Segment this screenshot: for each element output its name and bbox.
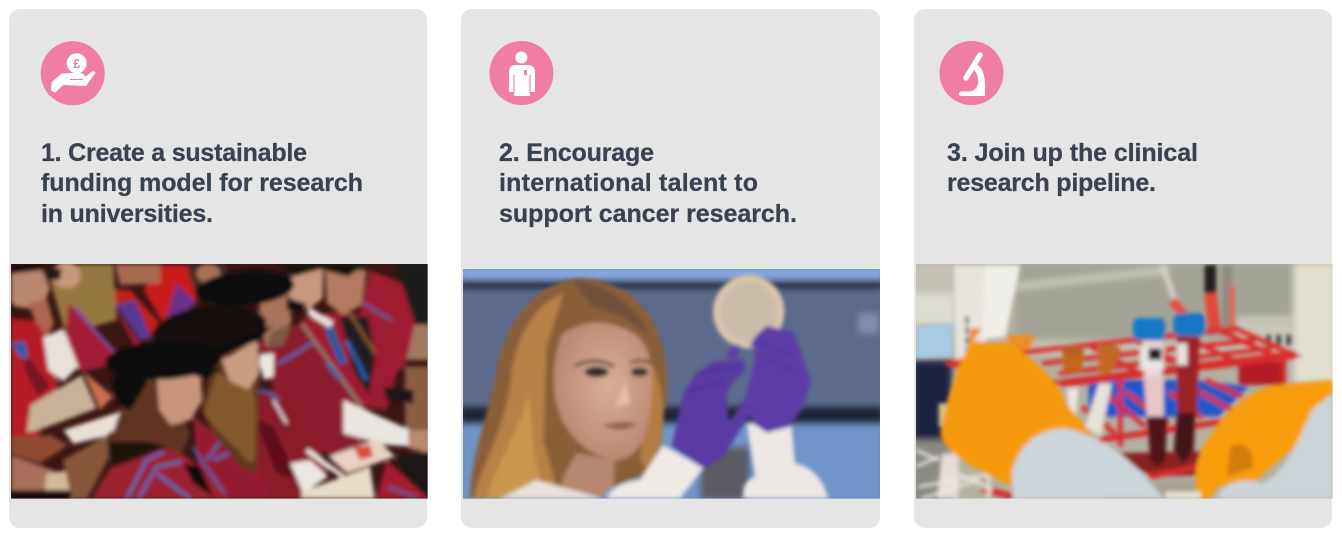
gloves xyxy=(725,343,742,360)
icon: person xyxy=(490,41,554,105)
photo: scientist inspecting a petri dish xyxy=(463,269,880,499)
front graduate with cap xyxy=(92,338,230,499)
heading: international talent: 2. Encourage xyxy=(499,139,654,167)
heading: funding model: 1. Create a sustainable xyxy=(41,139,307,167)
heading: international talent xyxy=(499,139,797,228)
third graduate with cap xyxy=(194,267,307,347)
panel: sustainable funding xyxy=(9,9,427,528)
central gown xyxy=(242,353,375,499)
heading: international talent: support cancer research. xyxy=(499,200,797,228)
background row of graduates xyxy=(50,262,430,430)
lab coat xyxy=(500,480,603,499)
right graduates xyxy=(257,264,430,499)
photo: graduates in red gowns xyxy=(11,264,428,499)
heading: funding model: in universities. xyxy=(41,200,213,228)
photo: blood sample tubes in a red rack xyxy=(916,264,1333,499)
heading: international talent: international talent to xyxy=(499,169,758,197)
panel: clinical research pipeline xyxy=(914,9,1332,528)
heading: clinical pipeline xyxy=(947,139,1198,197)
petri dish xyxy=(710,272,788,352)
panel: international talent xyxy=(461,9,880,528)
hair xyxy=(470,278,667,499)
neck and face xyxy=(557,453,615,499)
heading: funding model xyxy=(41,139,363,228)
left graduate with hand at face xyxy=(11,263,127,500)
heading: clinical pipeline: research pipeline. xyxy=(947,169,1156,197)
icon: hand holding pound coin xyxy=(40,41,105,106)
heading: clinical pipeline: 3. Join up the clinical xyxy=(947,139,1198,167)
second graduate with curly hair xyxy=(151,301,273,499)
heading: funding model: funding model for research xyxy=(41,169,363,197)
icon: microscope xyxy=(940,41,1004,105)
icon: hand holding pound coin: £ xyxy=(73,56,81,71)
